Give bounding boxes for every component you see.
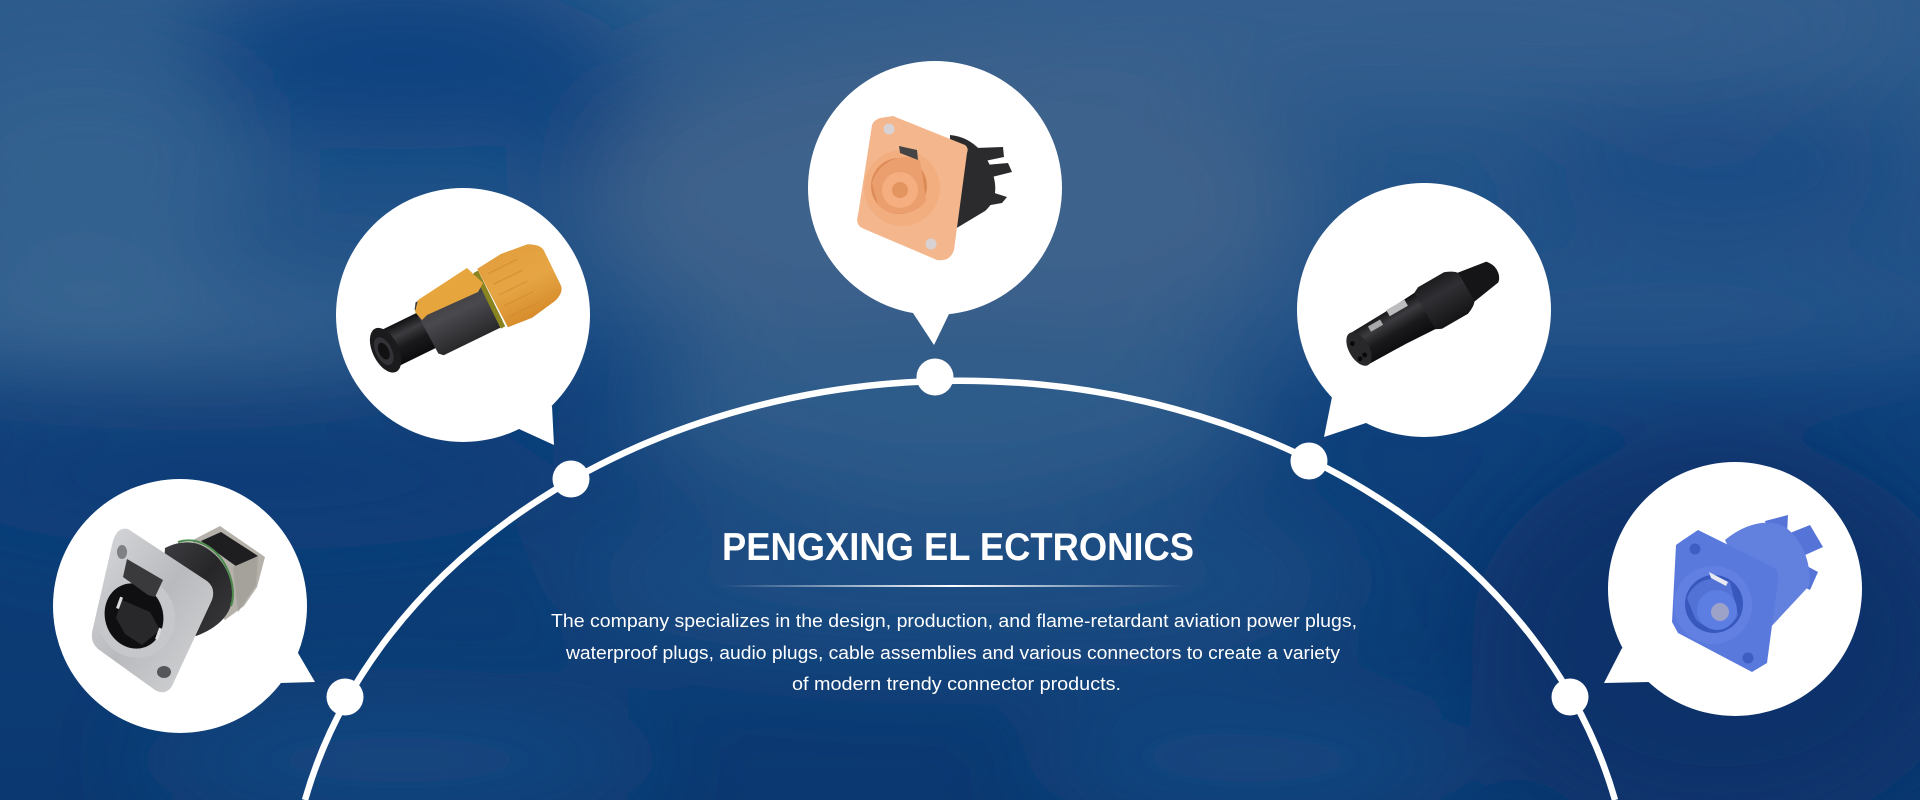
description text: waterproof plugs, audio plugs, cable assemblies and various connectors to create a variety: [565, 643, 1340, 663]
icon: strain relief: [1450, 254, 1506, 307]
icon: plug grey body: [412, 272, 505, 358]
node dots on the arc: [326, 358, 1588, 716]
icon: blue socket body and pins: [1725, 515, 1823, 630]
icon: black connector barrel: [160, 542, 232, 636]
speech bubble: black XLR connector: [1297, 183, 1551, 437]
icon: cap ribs: [488, 259, 538, 317]
icon: blue flange: [1672, 530, 1778, 672]
icon: mounting holes: [884, 124, 936, 250]
icon: metal shell: [1348, 293, 1435, 367]
speech bubble: orange speaker plug: [336, 188, 590, 445]
icon: silver flange: [92, 529, 213, 692]
icon: plug tip: [363, 323, 408, 378]
icon: speaker plug cylinder: [358, 236, 568, 387]
arc timeline: [305, 381, 1615, 800]
icon: connector opening: [86, 566, 186, 668]
description text: [551, 611, 1357, 694]
icon: plug yellow ring: [474, 271, 505, 329]
icon: silver latches: [1368, 320, 1383, 332]
icon: rubber latch: [123, 559, 163, 597]
icon: plug neck: [379, 309, 441, 367]
icon: orange flange: [857, 116, 968, 260]
speech bubble: orange panel socket: [808, 61, 1062, 345]
icon: socket ring: [1674, 566, 1752, 644]
icon: green seal ring: [178, 540, 233, 606]
title: PENGXING EL ECTRONICS: [722, 526, 1194, 569]
title divider: [722, 585, 1183, 587]
icon: orange latch: [415, 268, 483, 320]
icon: RJ45 rear housing: [190, 526, 265, 620]
icon: front face: [1341, 328, 1377, 370]
speech bubble: blue panel socket: [1604, 462, 1862, 716]
icon: mounting holes: [1690, 544, 1754, 664]
icon: mounting holes: [117, 545, 171, 678]
icon: orange cap: [476, 236, 568, 330]
icon: ribbed grip: [1411, 266, 1478, 333]
icon: black socket body and pins: [950, 135, 1012, 232]
speech bubble: silver ethernet connector: [53, 479, 315, 733]
description text: The company specializes in the design, production, and flame-retardant aviation power plugs,: [551, 611, 1357, 631]
icon: XLR connector: [1338, 249, 1509, 375]
icon: socket ring: [864, 146, 940, 226]
description text: of modern trendy connector products.: [792, 674, 1121, 694]
